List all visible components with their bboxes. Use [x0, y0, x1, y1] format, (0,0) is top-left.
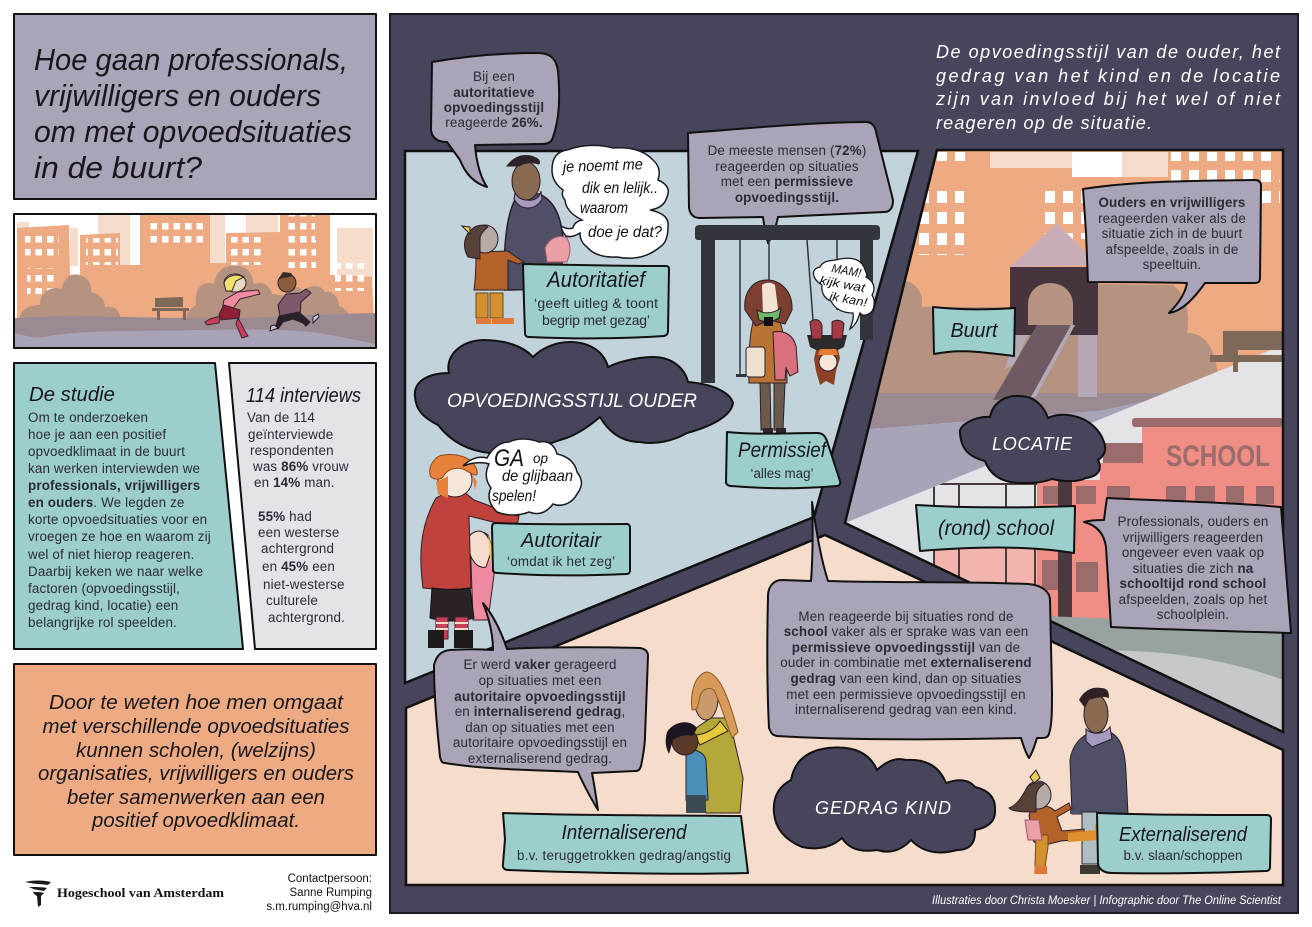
text block: study description [27, 410, 211, 630]
text block: respondent statistics: achtergrond. [268, 610, 345, 625]
heading: De studie: De studie [29, 384, 115, 406]
speech bubble: internalising: autoritaire opvoedingsstijl en [453, 735, 627, 750]
speech bubble: permissive 72%: opvoedingsstijl. [735, 190, 839, 205]
speech bubble: buurt: speeltuin. [1143, 257, 1201, 272]
text block: conclusion statement: met verschillende opvoedsituaties [42, 716, 350, 738]
credits: Illustraties door Christa Moesker | Infographic door The Online Scientist [932, 895, 1282, 907]
panel: gedrag kind background [406, 535, 1283, 885]
speech bubble: internalising: autoritaire opvoedingsstijl [454, 689, 626, 704]
text block: conclusion statement: Door te weten hoe men omgaat [49, 692, 345, 714]
label: OPVOEDINGSSTIJL OUDER: OPVOEDINGSSTIJL OUDER [447, 391, 697, 412]
label: Autoritatief: Autoritatief [545, 267, 648, 292]
contact person: Sanne Rumping [290, 887, 372, 899]
contact person [266, 873, 372, 913]
speech bubble: school combination: permissieve opvoedingsstijl van de [792, 640, 1020, 655]
text block: respondent statistics: achtergrond [261, 541, 334, 556]
speech bubble: school combination: school vaker als er sprake was van een [784, 624, 1028, 639]
text block: study description: belangrijke rol speelden. [28, 615, 177, 630]
text block: respondent statistics: en 45% een [262, 559, 335, 574]
speech bubble: mam kijk wat ik kan: kijk wat [818, 273, 867, 295]
text block: conclusion statement: beter samenwerken aan een [67, 787, 325, 809]
panel: opvoedingsstijl ouder background [405, 151, 918, 683]
text block: respondent statistics: 55% had [258, 509, 312, 524]
text block: conclusion statement: organisaties, vrijwilligers en ouders [38, 763, 354, 785]
speech bubble: school: afspeelden, zoals op het [1119, 592, 1268, 607]
label: Internaliserend [503, 813, 748, 874]
label: GEDRAG KIND: GEDRAG KIND [815, 798, 951, 818]
speech bubble: ga op de glijbaan: op [533, 450, 548, 466]
figure: swing set with mother and child [695, 225, 880, 434]
text block: respondent statistics [247, 410, 349, 625]
text block: respondent statistics: geïnterviewde [248, 427, 333, 442]
speech bubble: school combination [767, 502, 1052, 758]
speech bubble: internalising: dan op situaties met een [465, 720, 615, 735]
speech bubble: buurt: situatie zich in de buurt [1102, 226, 1242, 241]
speech bubble: permissive 72% [688, 122, 893, 243]
cloud: locatie [960, 396, 1105, 483]
speech bubble: je noemt me: waarom [580, 200, 628, 217]
label: Permissief [726, 432, 840, 488]
heading: 114 interviews: 114 interviews [246, 385, 361, 407]
speech bubble: permissive 72%: De meeste mensen (72%) [708, 143, 866, 158]
heading: main title: Hoe gaan professionals, [34, 42, 348, 77]
label: Autoritair: ‘omdat ik het zeg’ [507, 554, 615, 569]
heading: main title: om met opvoedsituaties [34, 114, 352, 149]
speech bubble: authoritative 26%: reageerde 26%. [445, 115, 543, 130]
text block: respondent statistics: respondenten [250, 443, 334, 458]
text block: respondent statistics: culturele [266, 593, 318, 608]
text block: respondent statistics: niet-westerse [263, 577, 345, 592]
speech bubble: buurt: afspeelde, zoals in de [1106, 242, 1238, 257]
speech bubble: internalising: en internaliserend gedrag, [455, 704, 625, 719]
panel: 114 interviews [229, 363, 376, 649]
speech bubble: ga op de glijbaan [463, 439, 582, 515]
label: LOCATIE: LOCATIE [992, 434, 1073, 454]
text block: respondent statistics: was 86% vrouw [252, 459, 349, 474]
icon: playground tower with slide [993, 223, 1098, 400]
panel: city illustration with running children [14, 214, 376, 348]
speech bubble: school: vrijwilligers reageerden [1123, 530, 1263, 545]
text block: respondent statistics: een westerse [258, 525, 339, 540]
cloud: gedrag kind [774, 747, 995, 852]
speech bubble: school combination: ouder in combinatie met externaliserend [780, 655, 1032, 670]
speech bubble: ga op de glijbaan: de glijbaan [502, 468, 573, 485]
icon: playground bench [1210, 331, 1283, 372]
label: Externaliserend [1097, 813, 1271, 873]
label: Internaliserend: b.v. teruggetrokken gedrag/angstig [517, 848, 731, 863]
label: Autoritatief [523, 264, 669, 338]
label: Externaliserend: b.v. slaan/schoppen [1124, 848, 1242, 863]
label: Externaliserend: Externaliserend [1119, 824, 1248, 846]
figure: authoritarian mother and child [421, 455, 519, 648]
text block: conclusion statement: positief opvoedklimaat. [91, 810, 300, 832]
logo: Hogeschool van Amsterdam [25, 880, 224, 907]
speech bubble: school combination: gedrag van een kind, dan op situaties [790, 671, 1022, 686]
heading: main title: vrijwilligers en ouders [34, 78, 321, 113]
text block: study description: professionals, vrijwilligers [28, 478, 200, 493]
panel: conclusion [14, 664, 376, 855]
label: Autoritatief: begrip met gezag’ [542, 312, 650, 328]
text block: study description: korte opvoedsituaties voor en [28, 512, 207, 527]
speech bubble: permissive 72%: met een permissieve [721, 174, 853, 189]
panel: locatie scene [840, 150, 1285, 750]
speech bubble: school combination: Men reageerde bij situaties rond de [798, 609, 1014, 624]
speech bubble: mam kijk wat ik kan: MAM! [830, 261, 863, 280]
text: SCHOOL sign: SCHOOL [1166, 440, 1270, 473]
speech bubble: internalising [434, 603, 648, 810]
speech bubble: school: ongeveer even vaak op [1122, 545, 1264, 560]
speech bubble: je noemt me: je noemt me [561, 156, 643, 176]
text block: study description: gedrag kind, locatie) een [28, 598, 178, 613]
icon: running girl [205, 274, 260, 338]
logo: Hogeschool van Amsterdam: Hogeschool van Amsterdam [57, 885, 224, 900]
text block: intro top right: gedrag van het kind en de locatie [936, 66, 1280, 86]
label: Autoritair [492, 523, 630, 575]
text block: intro top right: reageren op de situatie. [936, 113, 1152, 133]
speech bubble: internalising: externaliserend gedrag. [468, 751, 612, 766]
text block: study description: en ouders. We legden ze [28, 495, 185, 510]
panel: De studie [14, 363, 243, 649]
contact person: Contactpersoon: [288, 873, 372, 885]
text block: study description: factoren (opvoedingsstijl, [28, 581, 180, 596]
label: Buurt: Buurt [950, 320, 999, 342]
speech bubble: mam kijk wat ik kan [813, 258, 874, 329]
cloud: opvoedingsstijl ouder [415, 340, 733, 453]
speech bubble: school: situaties die zich na [1133, 561, 1254, 576]
speech bubble: internalising: Er werd vaker gerageerd [463, 657, 617, 672]
speech bubble: permissive 72%: reageerden op situaties [715, 159, 859, 174]
text block: intro top right: zijn van invloed bij het wel of niet [935, 89, 1281, 109]
speech bubble: authoritative 26% [431, 53, 559, 187]
speech bubble: buurt: Ouders en vrijwilligers [1098, 195, 1246, 210]
speech bubble: school: Professionals, ouders en [1118, 514, 1268, 529]
label: Internaliserend: Internaliserend [562, 822, 687, 844]
text block: study description: vroegen ze hoe en waarom zij [28, 529, 211, 544]
speech bubble: school combination: met een permissieve opvoedingsstijl en [786, 687, 1026, 702]
panel: title [14, 14, 376, 199]
heading: main title [34, 42, 352, 185]
speech bubble: buurt [1083, 180, 1261, 313]
figure: mother and withdrawn child [666, 672, 743, 813]
speech bubble: school combination: internaliserend gedrag van een kind. [795, 702, 1017, 717]
speech bubble: internalising: op situaties met een [479, 673, 601, 688]
label: Autoritair: Autoritair [520, 530, 602, 552]
heading: main title: in de buurt? [34, 150, 203, 185]
text block: respondent statistics: en 14% man. [254, 475, 335, 490]
speech bubble: je noemt me: doe je dat? [588, 224, 662, 241]
label: Permissief: ‘alles mag’ [750, 466, 814, 481]
text block: intro top right [935, 42, 1281, 133]
speech bubble: authoritative 26%: autoritatieve [453, 85, 535, 100]
text block: conclusion statement [38, 692, 354, 832]
speech bubble: authoritative 26%: opvoedingsstijl [444, 100, 544, 115]
speech bubble: buurt: reageerden vaker als de [1098, 211, 1246, 226]
label: rond school: (rond) school [938, 517, 1055, 540]
label: Permissief: Permissief [738, 439, 828, 462]
text block: study description: Daarbij keken we naar welke [28, 564, 203, 579]
speech bubble: ga op de glijbaan: GA [494, 445, 524, 472]
label: Autoritatief: ‘geeft uitleg & toont [534, 295, 658, 311]
speech bubble: school: schooltijd rond school [1120, 576, 1266, 591]
text block: conclusion statement: kunnen scholen, (welzijns) [76, 740, 316, 762]
label: rond school [916, 505, 1075, 553]
figure: authoritative parent and child [462, 155, 570, 324]
text block: intro top right: De opvoedingsstijl van de ouder, het [936, 42, 1281, 62]
text block: respondent statistics: Van de 114 [247, 410, 315, 425]
speech bubble: je noemt me [552, 145, 668, 258]
speech bubble: school: schoolplein. [1157, 607, 1229, 622]
text block: study description: hoe je aan een positief [28, 427, 166, 442]
speech bubble: je noemt me: dik en lelijk.. [582, 180, 658, 197]
text block: study description: kan werken interviewden we [28, 461, 200, 476]
panel: main comic [390, 14, 1298, 913]
speech bubble: mam kijk wat ik kan: ik kan! [828, 289, 869, 310]
figure: parent with kicking child [1009, 688, 1128, 874]
label: Buurt [933, 307, 1015, 356]
speech bubble: ga op de glijbaan: spelen! [492, 488, 536, 505]
text block: study description: Om te onderzoeken [28, 410, 148, 425]
speech bubble: school [1084, 498, 1291, 633]
icon: running boy [270, 272, 319, 331]
text block: study description: opvoedklimaat in de buurt [28, 444, 185, 459]
contact person: s.m.rumping@hva.nl [266, 901, 372, 913]
speech bubble: authoritative 26%: Bij een [473, 69, 515, 84]
text block: study description: wel of niet hierop reageren. [27, 547, 194, 562]
